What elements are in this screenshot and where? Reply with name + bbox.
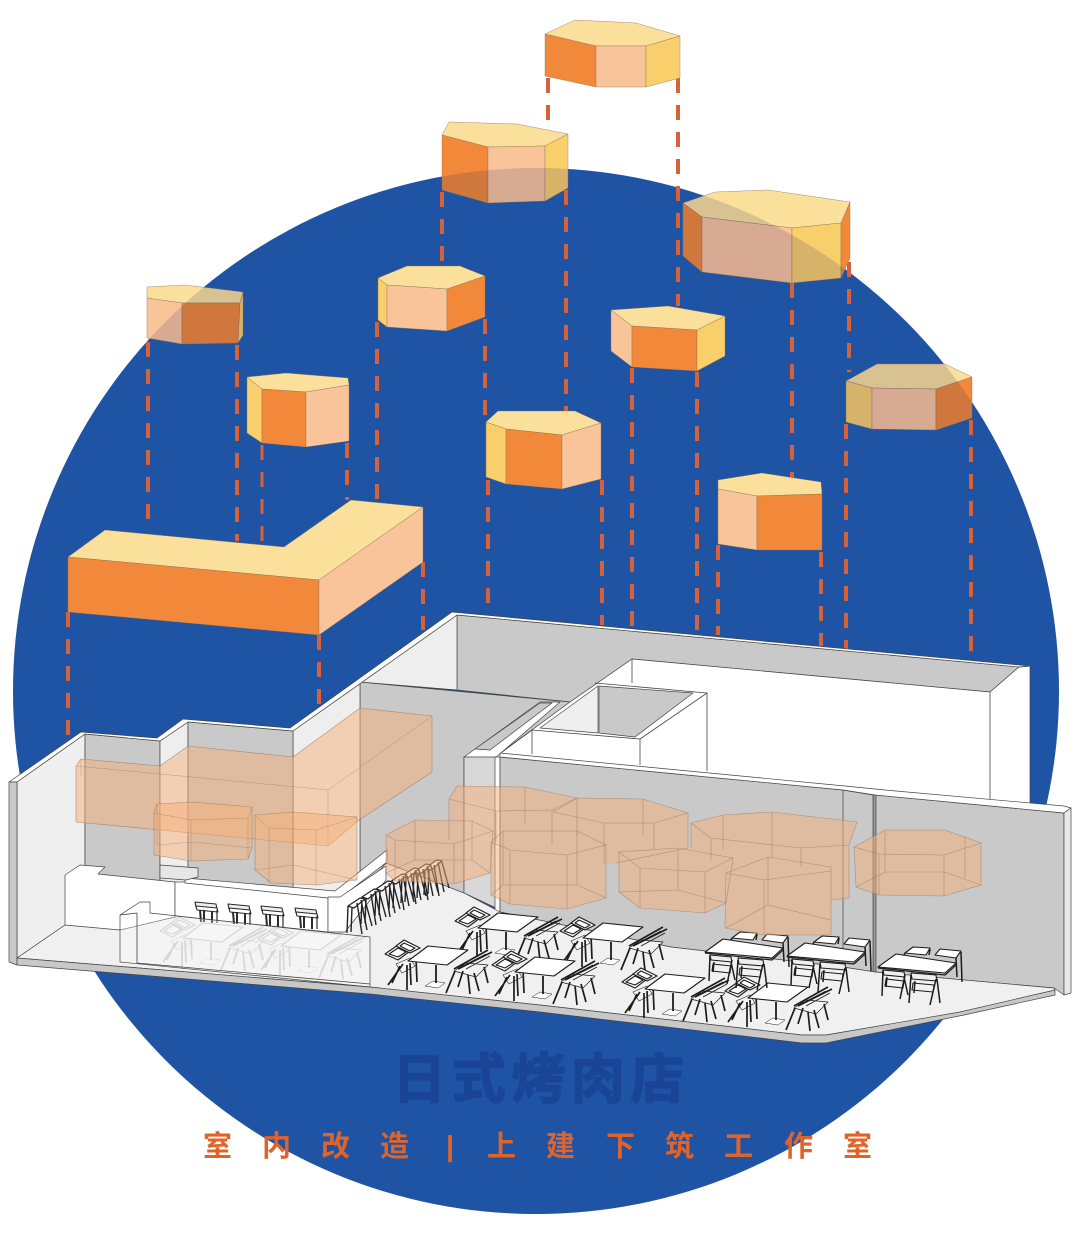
floating L-shaped block	[68, 500, 423, 635]
subtitle: 室内改造|上建下筑工作室	[203, 1130, 872, 1163]
glass partition	[120, 902, 370, 987]
title: 日式烤肉店	[392, 1050, 690, 1110]
bar stools	[195, 902, 318, 929]
hexagon volume edges	[386, 786, 981, 935]
translucent hexagon volumes: left pair	[154, 802, 357, 885]
floating block 5: upper right large	[683, 190, 850, 283]
floating block 8	[718, 473, 822, 550]
translucent volume: L-shaped ceiling	[76, 708, 432, 846]
tables and chairs	[385, 907, 962, 1031]
floating block 6	[611, 306, 725, 371]
counter walls	[65, 850, 387, 932]
floating block 4	[378, 266, 485, 331]
floating block 1: top hexagon	[545, 20, 680, 87]
floating block 3: left small	[147, 285, 243, 344]
floating block 10	[486, 411, 601, 489]
floating block 9	[247, 373, 349, 447]
translucent hexagon volumes: dining area	[386, 786, 981, 935]
floating block 2: crossing circle edge	[442, 122, 568, 203]
ghost tables behind glass	[160, 917, 365, 979]
corridor chair row	[347, 860, 449, 934]
dashed projection lines	[68, 78, 971, 740]
room shell	[9, 612, 1071, 1043]
axonometric restaurant interior	[9, 612, 1071, 1043]
floating block 7: right	[846, 364, 972, 430]
